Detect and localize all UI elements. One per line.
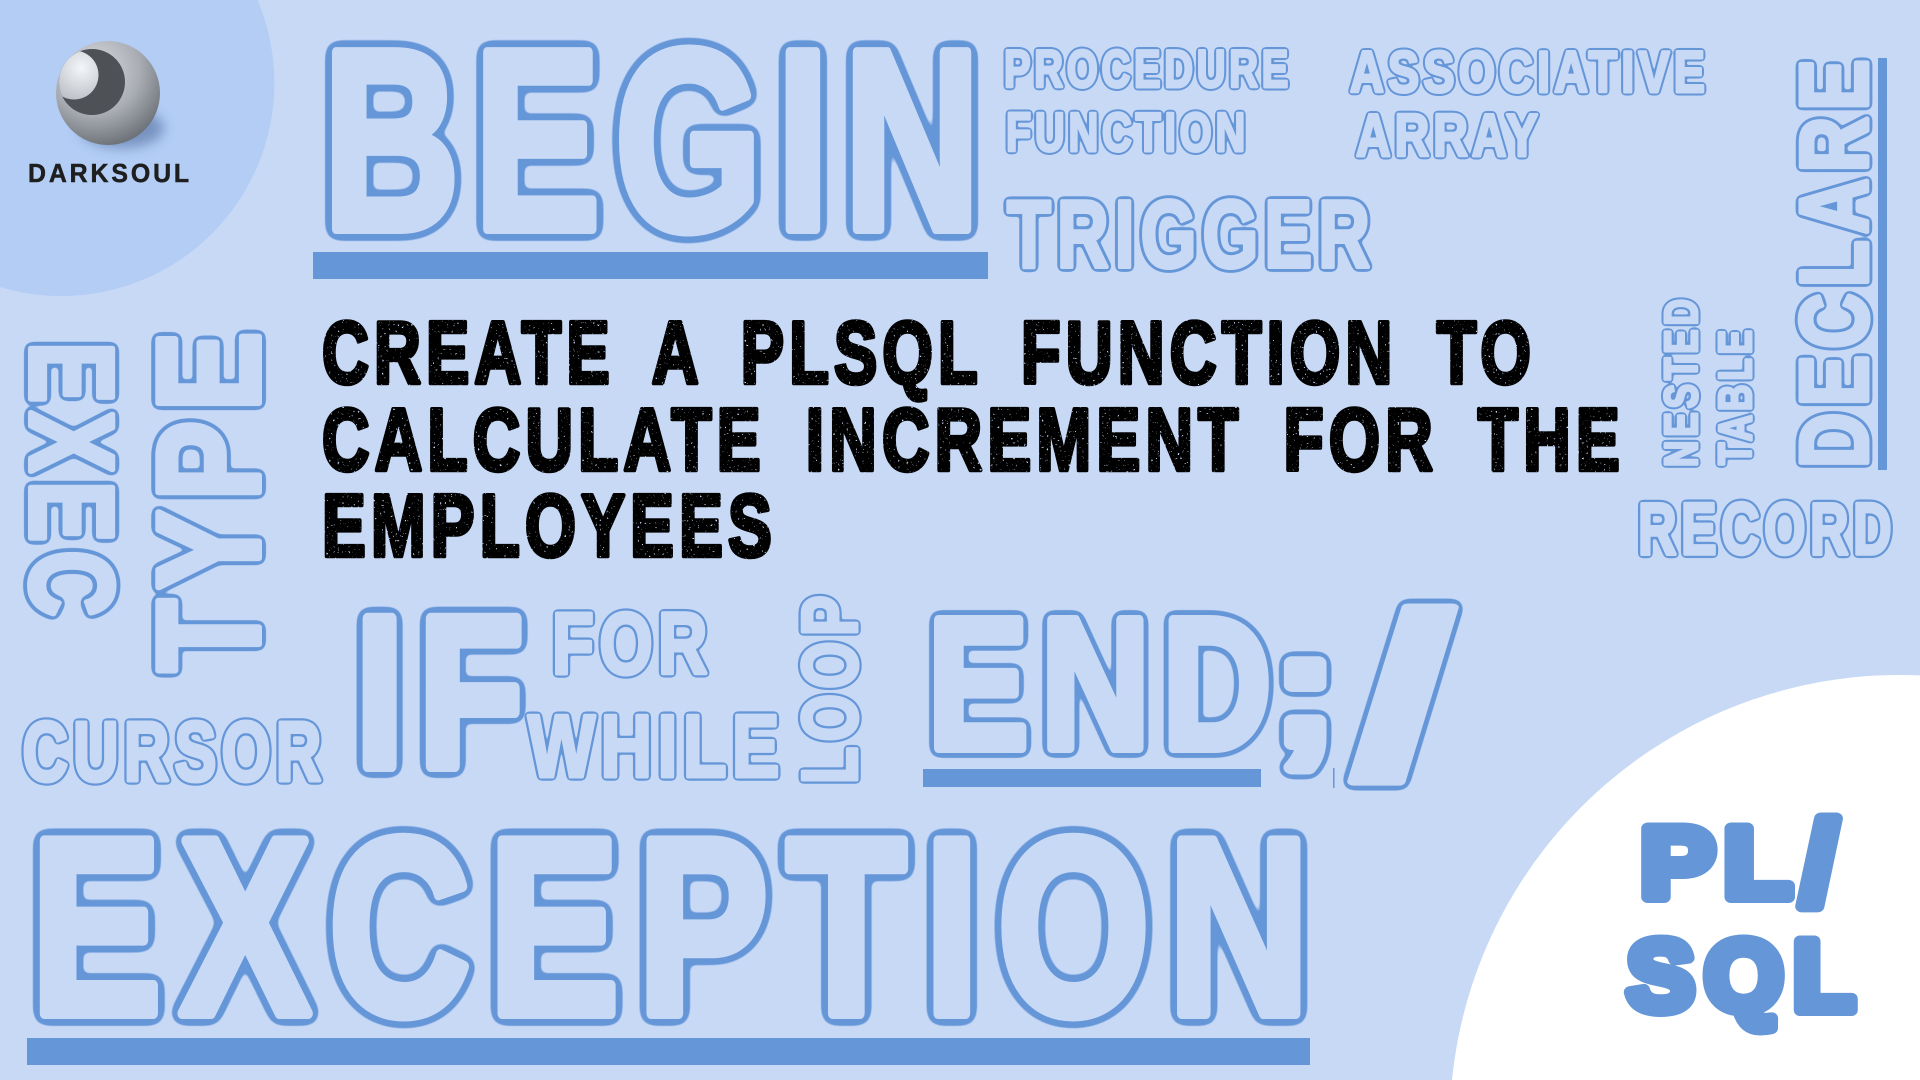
keyword: NESTED: NESTED	[1655, 295, 1707, 467]
keyword: EXEC: EXEC	[5, 342, 137, 625]
logo shadow	[80, 108, 164, 148]
semicolon: ;	[1274, 601, 1336, 777]
badge: SQL: SQL	[1627, 920, 1865, 1031]
keyword: LOOP: LOOP	[786, 590, 874, 784]
keyword: BEGIN: BEGIN	[323, 0, 995, 284]
keyword: END: END	[928, 581, 1284, 788]
keyword: ASSOCIATIVE: ASSOCIATIVE	[1350, 40, 1709, 105]
keyword: EXCEPTION: EXCEPTION	[31, 788, 1328, 1068]
title line 3: EMPLOYEES	[322, 476, 777, 575]
badge: PL/: PL	[1640, 807, 1783, 918]
underline: BEGIN	[313, 252, 988, 279]
underline: EXCEPTION	[27, 1038, 1310, 1065]
cursor tick	[1333, 768, 1334, 788]
logo inner moon	[59, 51, 98, 100]
keyword: TABLE: TABLE	[1709, 326, 1761, 465]
title line 1: CREATE A PLSQL FUNCTION TO	[322, 303, 1536, 402]
keyword: WHILE: WHILE	[528, 696, 785, 796]
side bar: DECLARE	[1878, 58, 1887, 470]
corner circle: logo backdrop	[0, 0, 274, 296]
badge: PL/: /	[1801, 798, 1846, 930]
logo: Darksoul	[28, 41, 192, 188]
keyword: CURSOR: CURSOR	[22, 704, 326, 798]
logo crescent	[59, 49, 125, 115]
keyword: TRIGGER: TRIGGER	[1007, 181, 1376, 288]
slash: /	[1350, 565, 1456, 827]
title	[322, 303, 1625, 575]
keyword: PROCEDURE: PROCEDURE	[1004, 40, 1292, 99]
keyword: IF: IF	[356, 573, 539, 812]
underline: END	[923, 769, 1261, 787]
corner circle: white	[1452, 675, 1920, 1080]
logo wordmark: DARKSOUL	[28, 158, 192, 188]
keyword: FUNCTION: FUNCTION	[1006, 101, 1249, 163]
keyword: ARRAY: ARRAY	[1356, 102, 1542, 169]
keyword: TYPE: TYPE	[128, 322, 290, 672]
logo sphere	[56, 41, 160, 145]
keyword: FOR: FOR	[552, 596, 713, 692]
